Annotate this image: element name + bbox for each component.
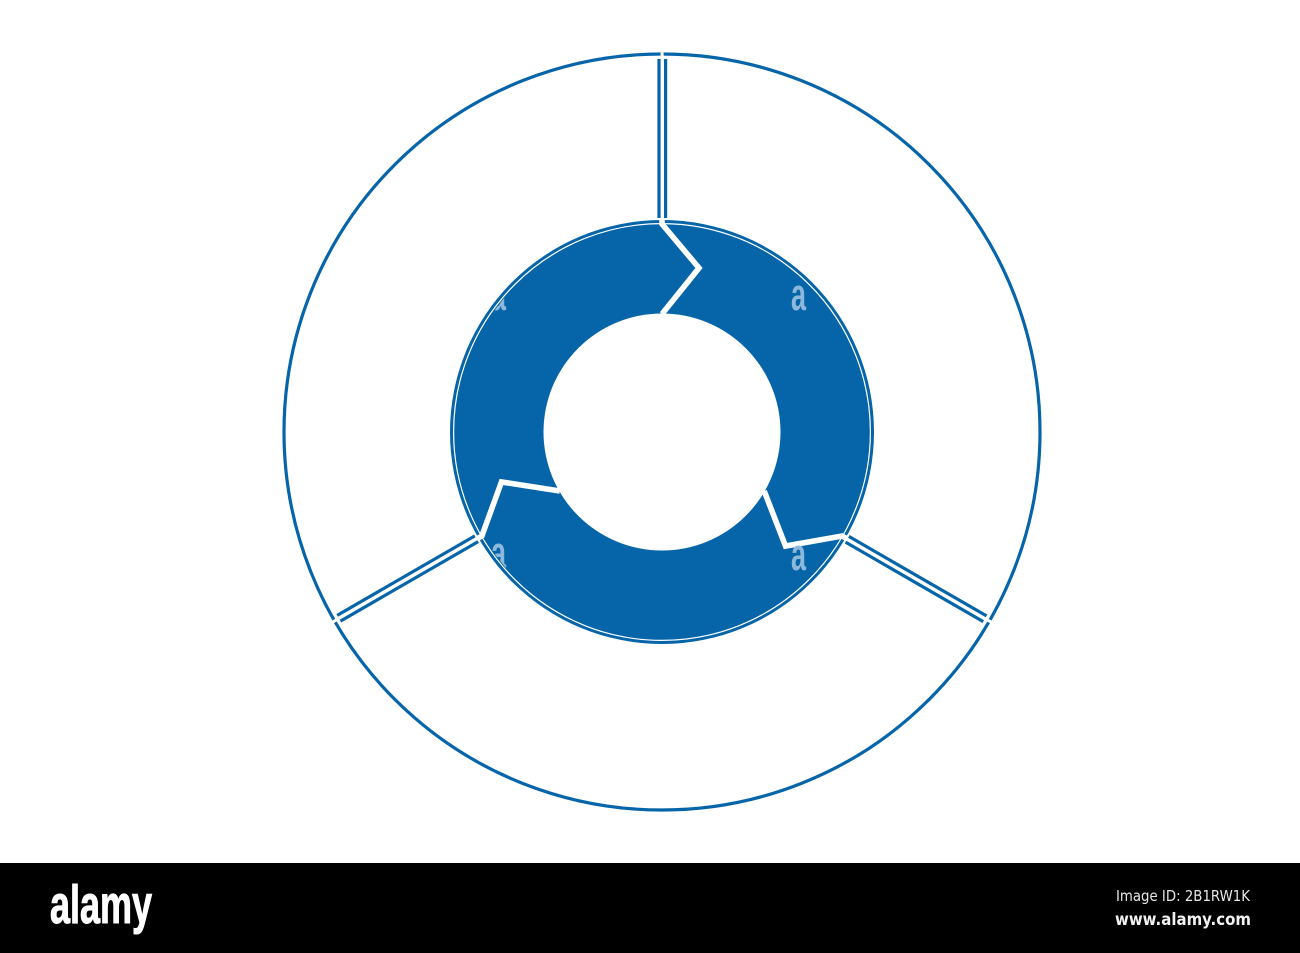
double divider line: lower right xyxy=(845,535,987,623)
footer band xyxy=(0,863,1300,953)
arrow gap: lower left xyxy=(458,459,560,539)
watermark letters: a xyxy=(791,529,807,580)
image id: Image ID: 2B1RW1K xyxy=(1116,887,1251,905)
watermark letters xyxy=(491,269,807,580)
double divider line: top xyxy=(657,59,667,218)
watermark letters: a xyxy=(491,527,507,578)
watermark letters: a xyxy=(491,269,507,320)
arrow gap: lower right xyxy=(746,491,847,571)
central blue ring with three arrow segments xyxy=(450,218,874,644)
watermark letters: a xyxy=(791,269,807,320)
footer logo: alamy xyxy=(50,875,152,935)
double divider line: lower left xyxy=(336,534,479,622)
arrow gap: top xyxy=(662,218,699,314)
outer ring divided into three segments xyxy=(284,48,1040,810)
website: www.alamy.com xyxy=(1115,910,1251,930)
